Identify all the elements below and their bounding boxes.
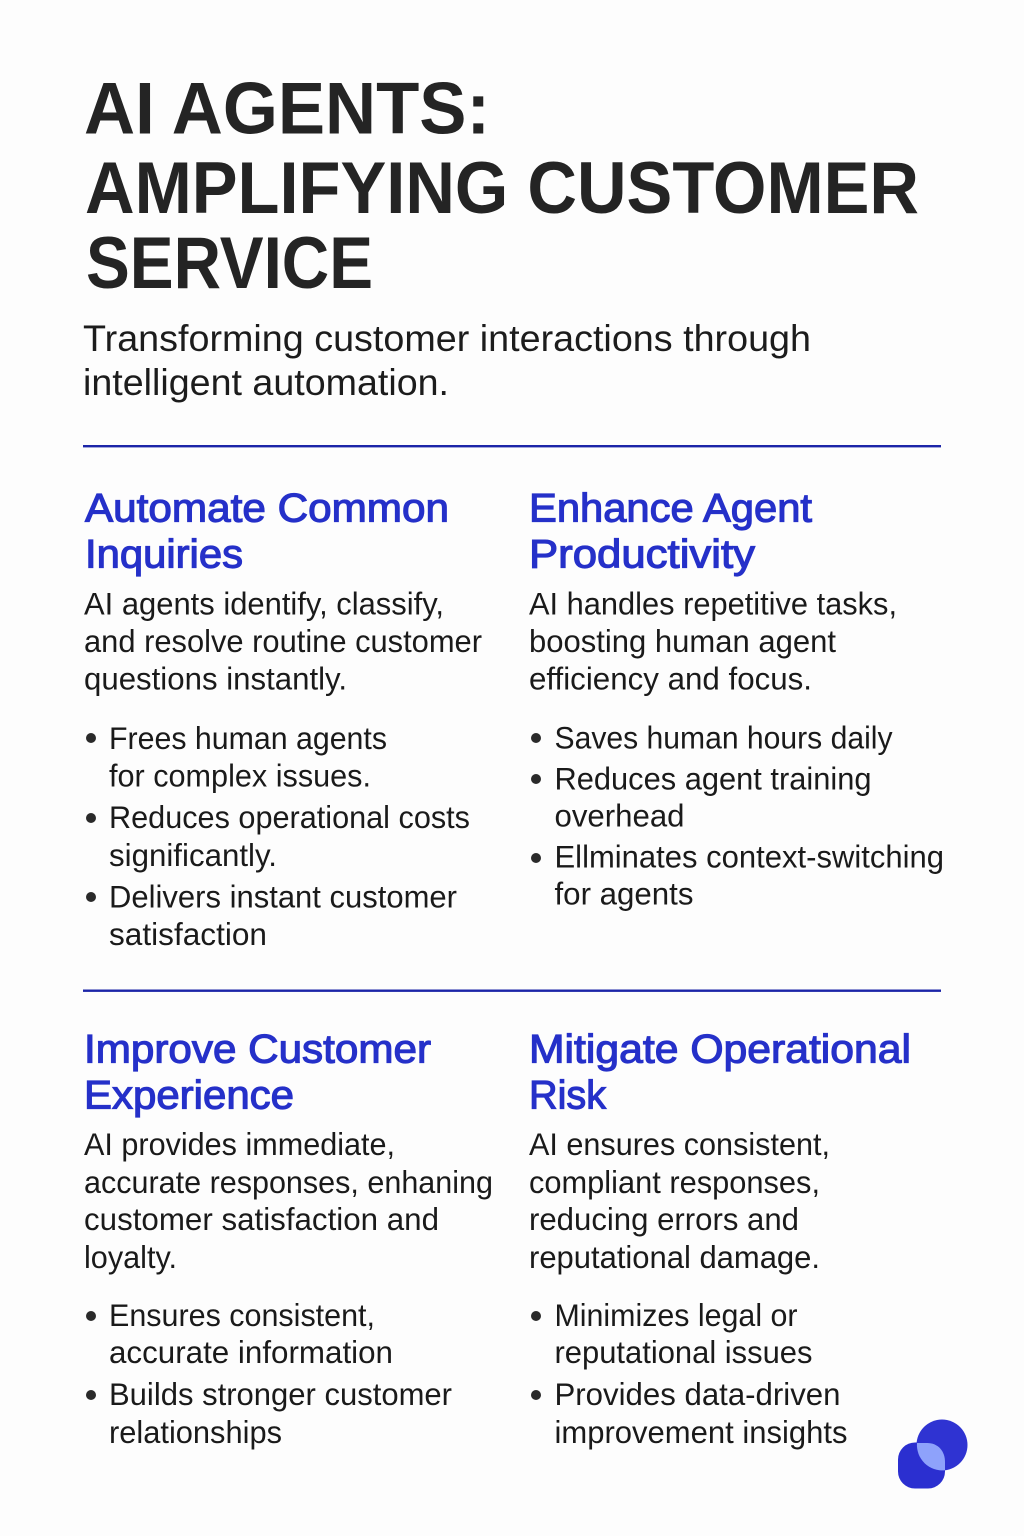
bullet list: Reduces operational costs bbox=[109, 799, 470, 835]
description: compliant responses, bbox=[529, 1164, 820, 1200]
title: AMPLIFYING CUSTOMER bbox=[85, 148, 919, 229]
description bbox=[84, 1126, 493, 1275]
bullet list: relationships bbox=[109, 1414, 282, 1450]
description bbox=[84, 586, 482, 696]
description: AI ensures consistent, bbox=[529, 1126, 830, 1162]
description: AI agents identify, classify, bbox=[84, 586, 444, 622]
description: and resolve routine customer bbox=[84, 623, 482, 659]
heading: Enhance Agent bbox=[529, 486, 812, 530]
description: accurate responses, enhaning bbox=[84, 1164, 493, 1200]
heading: Improve Customer bbox=[84, 1028, 431, 1072]
heading: Productivity bbox=[529, 532, 755, 576]
bullet list: overhead bbox=[554, 798, 684, 834]
bullet list bbox=[531, 1297, 848, 1450]
description bbox=[529, 586, 897, 696]
bullet list bbox=[86, 720, 470, 952]
heading bbox=[84, 1028, 431, 1118]
description: efficiency and focus. bbox=[529, 660, 812, 696]
description: boosting human agent bbox=[529, 623, 836, 659]
heading: Inquiries bbox=[85, 532, 243, 576]
subtitle bbox=[83, 318, 811, 403]
icon: logo of overlapping shapes bbox=[898, 1420, 968, 1488]
description: questions instantly. bbox=[84, 660, 347, 696]
heading bbox=[529, 486, 812, 576]
bullet list: for complex issues. bbox=[109, 758, 371, 794]
title: AI AGENTS: bbox=[84, 68, 490, 150]
description: AI provides immediate, bbox=[84, 1126, 395, 1162]
bullet list: Provides data-driven bbox=[554, 1376, 840, 1412]
heading: Mitigate Operational bbox=[529, 1028, 911, 1072]
bullet list: significantly. bbox=[109, 837, 277, 873]
bullet list: Reduces agent training bbox=[554, 760, 872, 796]
bullet list: Ellminates context-switching bbox=[554, 838, 944, 874]
description: reducing errors and bbox=[529, 1201, 799, 1237]
bullet list: reputational issues bbox=[554, 1334, 812, 1370]
bullet list: satisfaction bbox=[109, 916, 267, 952]
subtitle: Transforming customer interactions through bbox=[83, 318, 811, 359]
bullet list: Delivers instant customer bbox=[109, 878, 457, 914]
bullet list: Frees human agents bbox=[109, 720, 387, 756]
heading bbox=[85, 486, 449, 576]
description: customer satisfaction and bbox=[84, 1201, 439, 1237]
heading bbox=[529, 1028, 911, 1118]
description: AI handles repetitive tasks, bbox=[529, 586, 897, 622]
bullet list: Builds stronger customer bbox=[109, 1376, 452, 1412]
title bbox=[84, 68, 919, 304]
heading: Automate Common bbox=[85, 486, 449, 530]
heading: Risk bbox=[529, 1074, 606, 1118]
bullet list: for agents bbox=[554, 876, 694, 912]
bullet list: accurate information bbox=[109, 1334, 393, 1370]
panel: enhance agent productivity bbox=[529, 486, 944, 912]
bullet list: Saves human hours daily bbox=[554, 720, 893, 756]
panel: automate common inquiries bbox=[84, 486, 482, 952]
description: loyalty. bbox=[84, 1239, 177, 1275]
bullet list bbox=[86, 1297, 452, 1450]
panel: improve customer experience bbox=[84, 1028, 493, 1450]
title: SERVICE bbox=[86, 223, 373, 304]
description: reputational damage. bbox=[529, 1239, 820, 1275]
bullet list: Minimizes legal or bbox=[554, 1297, 798, 1333]
bullet list: improvement insights bbox=[554, 1414, 848, 1450]
panel: mitigate operational risk bbox=[529, 1028, 911, 1450]
bullet list: Ensures consistent, bbox=[109, 1297, 375, 1333]
description bbox=[529, 1126, 830, 1275]
heading: Experience bbox=[84, 1074, 294, 1118]
subtitle: intelligent automation. bbox=[83, 362, 449, 403]
bullet list bbox=[531, 720, 944, 912]
